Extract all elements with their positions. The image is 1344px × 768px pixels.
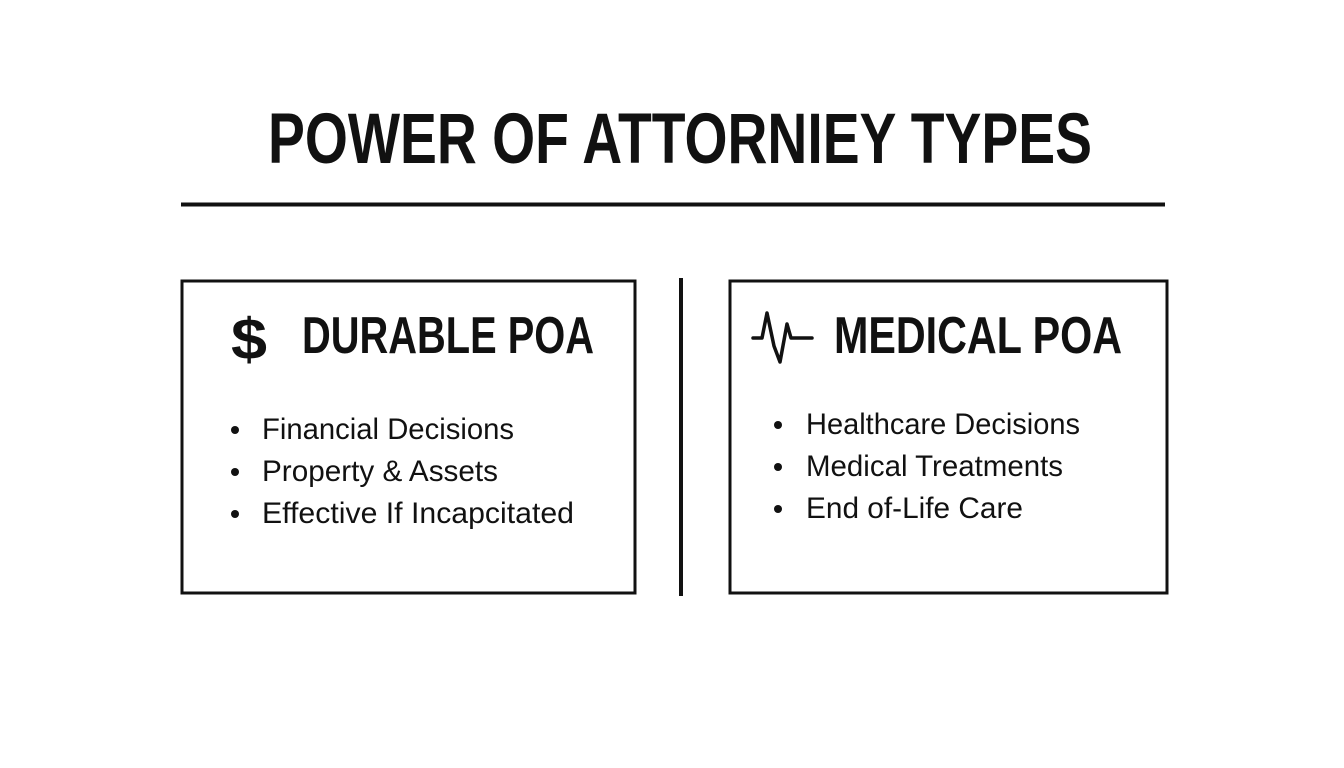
panel: durable POA [182,281,635,593]
bullet list: durable [231,413,574,530]
divider [679,278,683,596]
bullet list: medical [774,408,1080,525]
bullet list: durable: Financial Decisions [262,413,514,446]
icon: heartbeat [753,313,812,362]
bullet list: medical: Medical Treatments [806,450,1063,483]
bullet list: durable: Property & Assets [262,455,498,488]
bullet list: medical: Healthcare Decisions [806,408,1080,441]
heading: durable POA: DURABLE POA [302,307,594,365]
heading: medical POA: MEDICAL POA [834,307,1122,365]
bullet list: durable: Effective If Incapcitated [262,497,574,530]
bullet list: medical: End of-Life Care [806,492,1023,525]
icon: dollar: $ [231,307,267,372]
panel: medical POA [730,281,1167,593]
title: POWER OF ATTORNIEY TYPES [268,100,1092,179]
